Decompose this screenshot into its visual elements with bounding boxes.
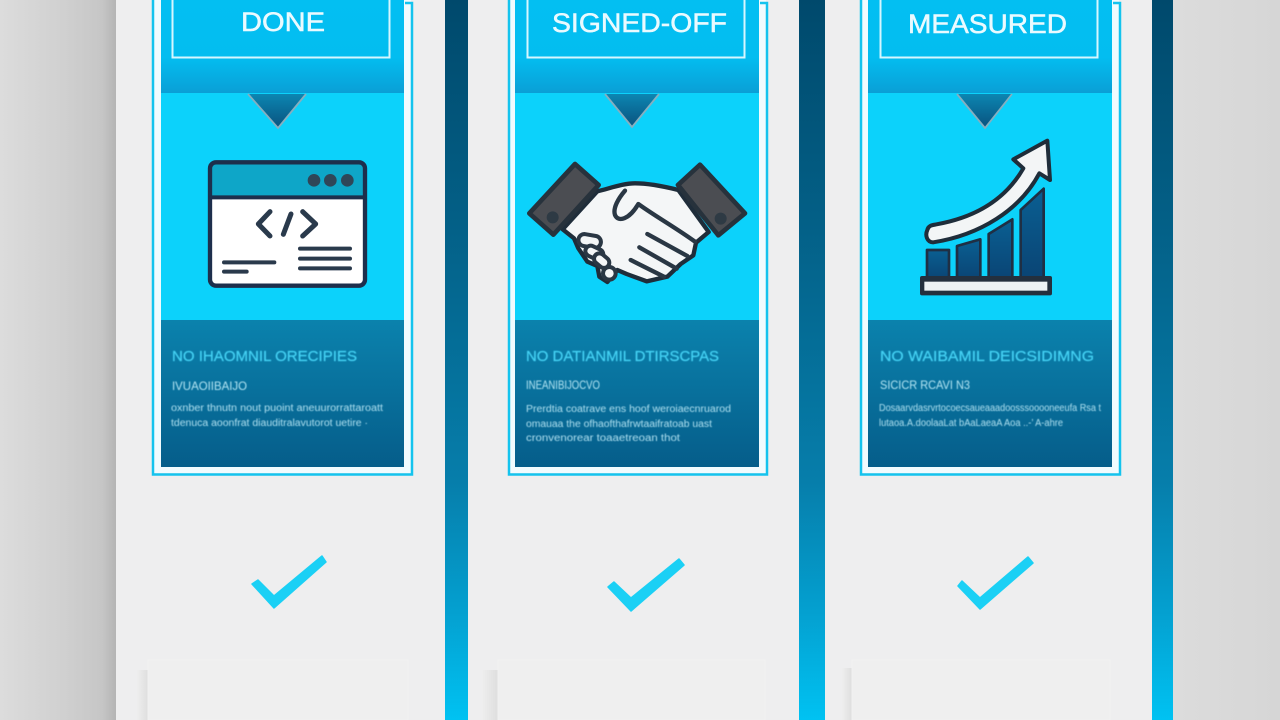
faint bottom box 3: [842, 660, 1110, 720]
description block: [515, 320, 759, 467]
heading box: signed-off: [528, 0, 744, 58]
description block: Prerdtia coatrave ens hoof weroiaecnruarod: [526, 404, 731, 415]
panel: signed-off card: [509, 0, 767, 611]
description block: [161, 320, 404, 467]
description block: cronvenorear toaaetreoan thot: [526, 433, 680, 444]
check mark: [252, 556, 326, 608]
description block: NO WAIBAMIL DEICSIDIMNG: [880, 348, 1094, 365]
heading box: measured: [880, 0, 1098, 58]
header band: [868, 0, 1112, 93]
card frame: [153, 0, 412, 474]
panel: done card: [153, 0, 412, 608]
down arrow: [605, 94, 659, 127]
white inner frame: [510, 0, 766, 473]
heading box: done: DONE: [241, 7, 325, 37]
heading box: measured: MEASURED: [908, 9, 1067, 39]
faint bottom box 1: [137, 660, 408, 720]
background left: [0, 0, 116, 720]
header band: [515, 0, 759, 93]
description block: oxnber thnutn nout puoint aneuurorrattaroatt: [171, 403, 383, 414]
description block: lutaoa.A.doolaaLat bAaLaeaA Aoa ..-’ A-ahre: [879, 418, 1063, 429]
description block: [868, 320, 1112, 467]
cyan body: [868, 93, 1112, 321]
description block: INEANIBIJOCVO: [526, 378, 600, 392]
cyan body: [161, 93, 404, 321]
panel: measured card: [861, 0, 1120, 609]
heading box: signed-off: SIGNED-OFF: [552, 8, 727, 38]
heading box: done: [172, 0, 390, 58]
card frame: [861, 0, 1120, 474]
faint bottom box 2: [482, 660, 765, 720]
icon: growth chart: [920, 141, 1052, 295]
white inner frame: [862, 0, 1119, 473]
card frame: [509, 0, 767, 474]
check mark: [608, 559, 684, 611]
description block: NO IHAOMNIL ORECIPIES: [172, 348, 357, 365]
down arrow: [957, 94, 1012, 128]
column divider bar 1: [445, 0, 468, 720]
description block: omauaa the ofhaofthafrwtaaifratoab uast: [526, 419, 712, 430]
description block: SICICR RCAVI N3: [880, 378, 970, 392]
description block: Dosaarvdasrvrtocoecsaueaaadoosssooooneeufa Rsa t: [879, 403, 1101, 414]
white inner frame: [154, 0, 411, 473]
column divider bar 3: [1152, 0, 1173, 720]
header band: [161, 0, 404, 93]
icon: code browser window: [210, 162, 365, 286]
description block: NO DATIANMIL DTIRSCPAS: [526, 348, 719, 365]
cyan body: [515, 93, 759, 321]
check mark: [958, 557, 1033, 609]
description block: tdenuca aoonfrat diauditralavutorot uetire ·: [171, 418, 368, 429]
icon: handshake: [529, 164, 745, 282]
description block: IVUAOIIBAIJO: [172, 379, 247, 393]
down arrow: [248, 94, 306, 128]
background right: [1173, 0, 1280, 720]
column divider bar 2: [799, 0, 825, 720]
